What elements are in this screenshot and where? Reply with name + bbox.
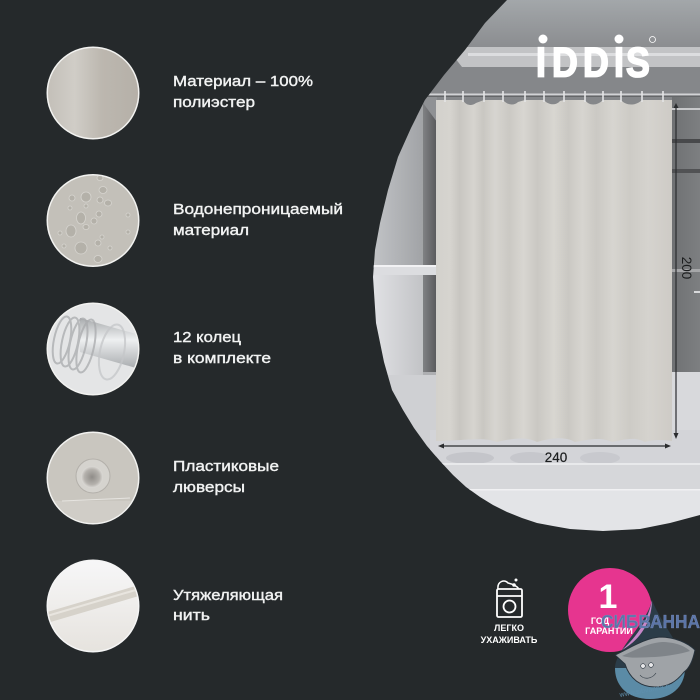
text: waterproof: Водонепроницаемый bbox=[173, 201, 343, 218]
text: eyelets: люверсы bbox=[173, 479, 245, 496]
bath rim bbox=[622, 642, 690, 658]
arrow: width dimension bbox=[438, 444, 671, 448]
label: easy care bbox=[481, 623, 538, 645]
text: material: полиэстер bbox=[173, 94, 255, 111]
arrow: height dimension bbox=[674, 103, 678, 439]
badge: 1 year warranty bbox=[568, 568, 652, 652]
bath bbox=[615, 637, 695, 687]
label: easy care: ЛЕГКО bbox=[494, 623, 524, 633]
text: rings: в комплекте bbox=[173, 350, 271, 367]
feature 1: material bbox=[46, 46, 313, 140]
text: rings: 12 колец bbox=[173, 329, 241, 346]
label: easy care: УХАЖИВАТЬ bbox=[481, 635, 538, 645]
text: material bbox=[173, 73, 313, 111]
watermark url: www.sibvanna.ru bbox=[618, 683, 673, 699]
swatch: plastic eyelet bbox=[46, 432, 140, 524]
bathroom scene bbox=[370, 0, 700, 535]
swatch: water drops bbox=[46, 174, 140, 267]
label: width 240: 240 bbox=[545, 450, 567, 465]
feature 2: waterproof bbox=[46, 174, 343, 267]
water drop bbox=[615, 600, 685, 699]
swatch: rod with rings bbox=[46, 302, 140, 396]
text: rings bbox=[173, 329, 271, 367]
badge: 1 year warranty: ГОД bbox=[591, 616, 610, 626]
text: eyelets bbox=[173, 458, 279, 496]
text: waterproof bbox=[173, 201, 343, 239]
logo: IDDIS: IDDIS bbox=[536, 40, 650, 86]
feature 5: weighted thread bbox=[46, 560, 283, 652]
text: weighted thread: Утяжеляющая bbox=[173, 587, 283, 604]
text: weighted thread: нить bbox=[173, 607, 210, 624]
curtain bbox=[436, 100, 672, 442]
badge: 1 year warranty: ГАРАНТИИ bbox=[585, 626, 633, 636]
watermark: Sibvanna mascot bbox=[601, 600, 700, 699]
curtain rings bbox=[445, 91, 663, 102]
icon: washing machine bbox=[497, 578, 522, 617]
text: eyelets: Пластиковые bbox=[173, 458, 279, 475]
text: waterproof: материал bbox=[173, 222, 249, 239]
badge: 1 year warranty: 1 bbox=[599, 578, 617, 616]
swatch: hem thread bbox=[46, 560, 140, 652]
curtain rod bbox=[428, 94, 700, 97]
text: weighted thread bbox=[173, 587, 283, 624]
feature 3: rings bbox=[46, 302, 271, 396]
photo: bathroom with curtain bbox=[370, 0, 700, 535]
swatch: fabric bbox=[46, 46, 140, 140]
feature 4: eyelets bbox=[46, 432, 279, 524]
text: material: Материал – 100% bbox=[173, 73, 313, 90]
face bbox=[640, 663, 656, 678]
label: height 200: 200 bbox=[679, 257, 694, 279]
